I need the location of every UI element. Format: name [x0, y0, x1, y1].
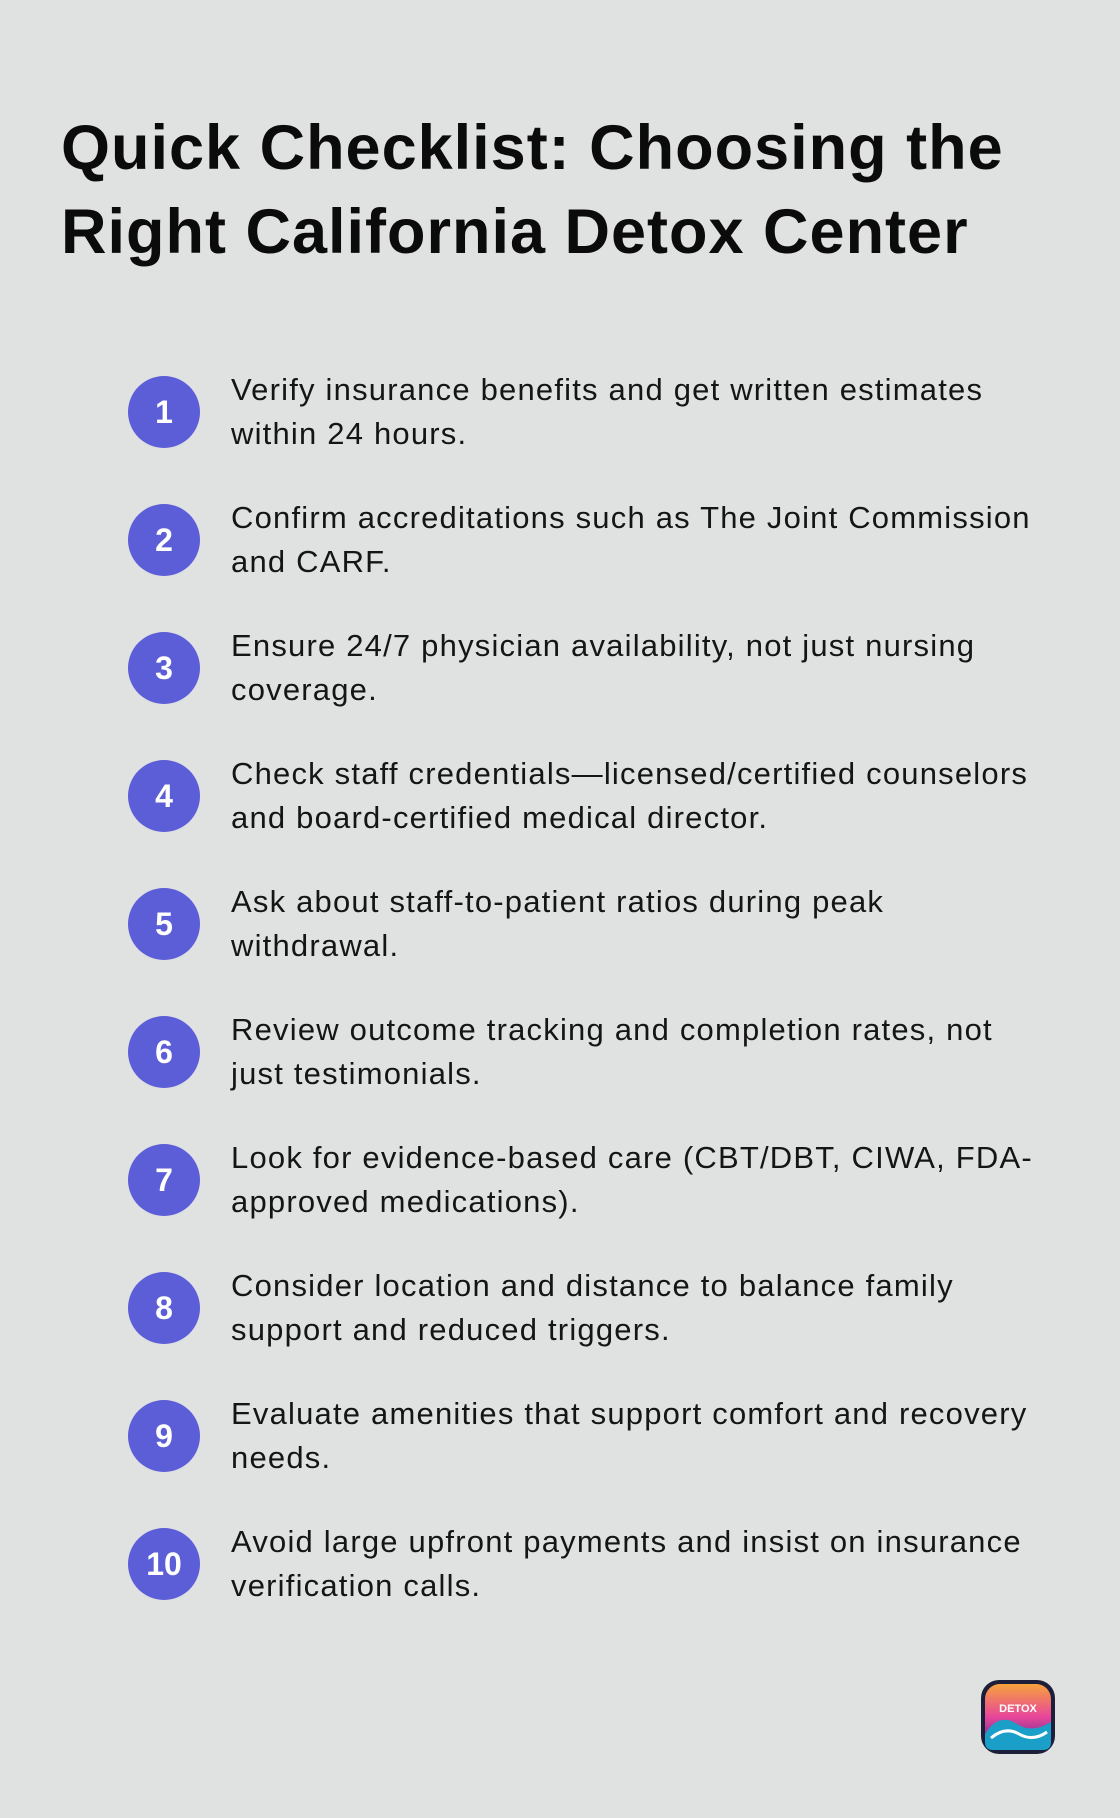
number badge 4 — [128, 760, 200, 832]
number badge 3 — [128, 632, 200, 704]
text 3: Ensure 24/7 physician availability, not just nursing — [231, 628, 975, 663]
text 6: Review outcome tracking and completion rates, not — [231, 1012, 993, 1047]
logo — [981, 1680, 1055, 1754]
item 8 — [128, 1268, 954, 1347]
item 5 — [128, 884, 884, 963]
text 9: Evaluate amenities that support comfort and recovery — [231, 1396, 1027, 1431]
item 4 — [128, 756, 1028, 835]
text 7: Look for evidence-based care (CBT/DBT, CIWA, FDA- — [231, 1140, 1033, 1175]
number badge 1: 1 — [155, 394, 173, 430]
item 1 — [128, 372, 983, 451]
number badge 8: 8 — [155, 1290, 173, 1326]
item 2 — [128, 500, 1031, 579]
text 10 — [231, 1524, 1022, 1603]
number badge 1 — [128, 376, 200, 448]
text 9: needs. — [231, 1440, 331, 1475]
text 7 — [231, 1140, 1033, 1219]
text 10: verification calls. — [231, 1568, 481, 1603]
item 3 — [128, 628, 975, 707]
text 1: Verify insurance benefits and get written estimates — [231, 372, 983, 407]
number badge 6: 6 — [155, 1034, 173, 1070]
text 8: Consider location and distance to balance family — [231, 1268, 954, 1303]
text 4: Check staff credentials—licensed/certified counselors — [231, 756, 1028, 791]
item 9 — [128, 1396, 1027, 1475]
text 1: within 24 hours. — [231, 416, 467, 451]
text 3: coverage. — [231, 672, 378, 707]
logo: DETOX — [999, 1703, 1038, 1715]
text 9 — [231, 1396, 1027, 1475]
text 4: and board-certified medical director. — [231, 800, 768, 835]
number badge 2 — [128, 504, 200, 576]
text 3 — [231, 628, 975, 707]
number badge 8 — [128, 1272, 200, 1344]
number badge 9: 9 — [155, 1418, 173, 1454]
number badge 5: 5 — [155, 906, 173, 942]
text 2: and CARF. — [231, 544, 392, 579]
text 5: Ask about staff-to-patient ratios during peak — [231, 884, 884, 919]
text 5 — [231, 884, 884, 963]
number badge 7: 7 — [155, 1162, 173, 1198]
number badge 10 — [128, 1528, 200, 1600]
text 7: approved medications). — [231, 1184, 580, 1219]
text 2: Confirm accreditations such as The Joint Commission — [231, 500, 1031, 535]
text 6 — [230, 1012, 993, 1091]
text 10: Avoid large upfront payments and insist on insurance — [231, 1524, 1022, 1559]
text 8: support and reduced triggers. — [231, 1312, 671, 1347]
title — [61, 113, 1004, 267]
text 4 — [231, 756, 1028, 835]
number badge 9 — [128, 1400, 200, 1472]
item 10 — [128, 1524, 1022, 1603]
number badge 3: 3 — [155, 650, 173, 686]
item 7 — [128, 1140, 1033, 1219]
title: Right California Detox Center — [61, 197, 969, 267]
number badge 4: 4 — [155, 778, 173, 814]
number badge 10: 10 — [146, 1546, 182, 1582]
text 5: withdrawal. — [231, 928, 399, 963]
number badge 5 — [128, 888, 200, 960]
number badge 7 — [128, 1144, 200, 1216]
title: Quick Checklist: Choosing the — [61, 113, 1004, 183]
text 6: just testimonials. — [231, 1056, 482, 1091]
number badge 2: 2 — [155, 522, 173, 558]
text 1 — [231, 372, 983, 451]
text 8 — [231, 1268, 954, 1347]
item 6 — [128, 1012, 993, 1091]
number badge 6 — [128, 1016, 200, 1088]
text 2 — [231, 500, 1031, 579]
